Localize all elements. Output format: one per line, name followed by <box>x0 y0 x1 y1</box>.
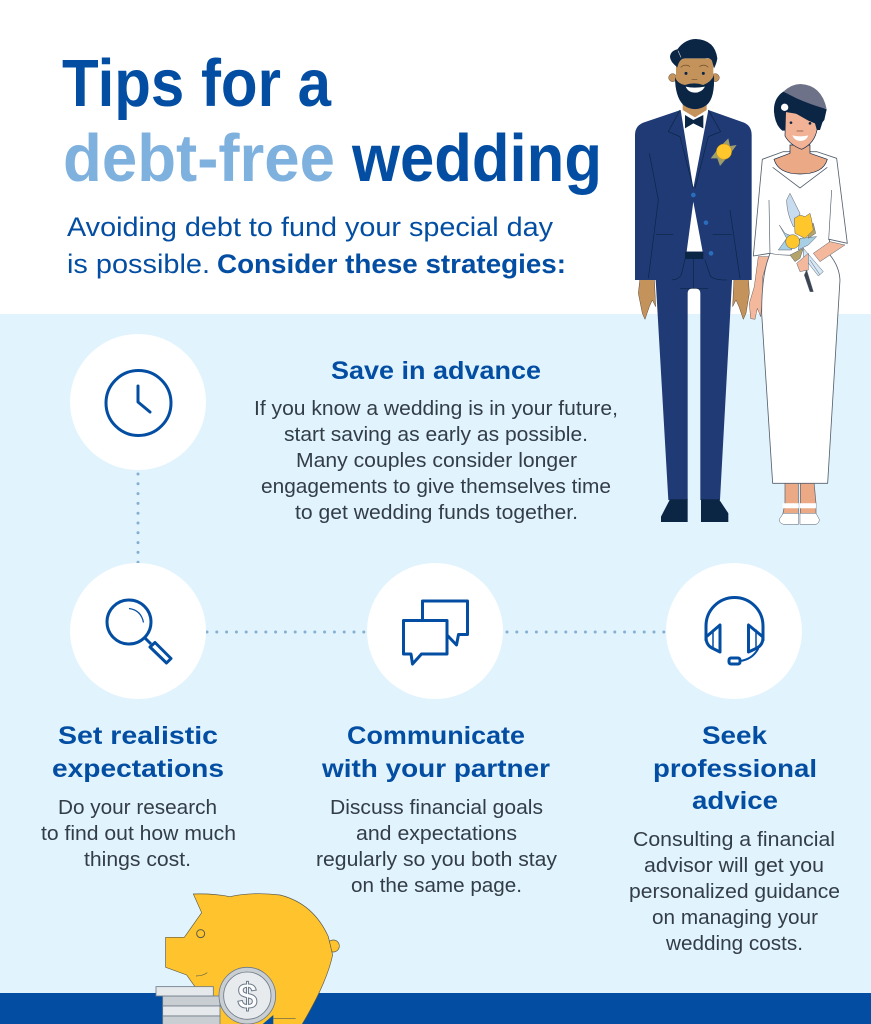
piggy details <box>196 930 296 1018</box>
block: seek professional advice: advice <box>692 787 778 815</box>
illustration: piggy bank and coins <box>156 894 339 1024</box>
bouquet <box>778 193 823 292</box>
groom jacket lines <box>648 110 740 288</box>
block: set realistic expectations: to find out how much <box>41 823 236 845</box>
block: communicate with your partner: regularly so you both stay <box>316 849 557 871</box>
piggy bank <box>166 894 339 1024</box>
block: communicate with your partner: and expectations <box>356 823 517 845</box>
block: set realistic expectations: expectations <box>52 755 224 783</box>
dollar coin <box>219 967 276 1024</box>
bride left arm and hand <box>749 257 769 319</box>
block: communicate with your partner: Communicate <box>347 722 525 750</box>
groom buttons <box>691 193 713 256</box>
bride neckline <box>774 145 827 174</box>
block: seek professional advice: on managing your <box>652 907 818 929</box>
groom trousers <box>654 257 733 500</box>
title <box>62 46 602 196</box>
coin stack <box>156 987 220 1024</box>
groom boutonniere <box>711 138 737 166</box>
block: save in advance <box>254 357 618 524</box>
groom head <box>669 39 719 117</box>
bride head <box>774 84 827 149</box>
block: set realistic expectations: Do your research <box>58 797 217 819</box>
bride dress <box>753 152 847 483</box>
block: seek professional advice <box>629 722 840 955</box>
light blue panel background <box>0 314 871 1024</box>
subtitle: Avoiding debt to fund your special day <box>67 212 554 242</box>
block: save in advance: Many couples consider longer <box>296 450 577 472</box>
block: set realistic expectations <box>41 722 236 871</box>
block: save in advance: start saving as early as possible. <box>284 424 588 446</box>
block: save in advance: to get wedding funds together. <box>295 502 578 524</box>
bride legs <box>783 482 816 515</box>
dollar coin: $ <box>237 975 257 1016</box>
subtitle <box>67 212 566 279</box>
block: save in advance: Save in advance <box>331 357 541 385</box>
block: communicate with your partner <box>316 722 557 897</box>
block: save in advance: engagements to give themselves time <box>261 476 611 498</box>
block: seek professional advice: advisor will get you <box>644 855 824 877</box>
title: wedding <box>351 121 602 196</box>
groom lower shirt <box>687 202 703 252</box>
illustration: bride <box>749 84 847 524</box>
groom hands <box>638 278 749 319</box>
block: set realistic expectations: Set realistic <box>58 722 218 750</box>
illustration: groom <box>635 39 752 522</box>
bar sliver below coin <box>262 1015 273 1024</box>
bride sandals <box>779 503 819 524</box>
icon: magnifying glass <box>70 563 206 699</box>
subtitle: is possible. <box>67 249 210 279</box>
icon: clock <box>70 334 206 470</box>
dotted connectors <box>138 474 666 632</box>
groom belt <box>685 252 703 259</box>
groom bow tie <box>685 115 703 128</box>
groom shoes <box>661 499 728 522</box>
subtitle: Consider these strategies: <box>217 249 566 279</box>
icon: chat bubbles <box>367 563 503 699</box>
block: seek professional advice: professional <box>653 755 817 783</box>
block: communicate with your partner: Discuss financial goals <box>330 797 543 819</box>
title: debt-free <box>63 121 335 196</box>
bride dress lines <box>769 190 832 255</box>
block: save in advance: If you know a wedding is in your future, <box>254 398 618 420</box>
title: Tips for a <box>62 46 332 121</box>
block: set realistic expectations: things cost. <box>84 849 191 871</box>
icon: headset <box>666 563 802 699</box>
bride right forearm <box>813 242 845 262</box>
block: seek professional advice: wedding costs. <box>665 933 803 955</box>
groom shirt collar <box>680 109 708 190</box>
block: communicate with your partner: on the same page. <box>351 875 522 897</box>
groom jacket <box>635 110 752 280</box>
block: seek professional advice: Consulting a financial <box>633 829 835 851</box>
block: seek professional advice: Seek <box>702 722 767 750</box>
bottom bar <box>0 993 871 1024</box>
block: seek professional advice: personalized guidance <box>629 881 840 903</box>
block: communicate with your partner: with your partner <box>321 755 550 783</box>
